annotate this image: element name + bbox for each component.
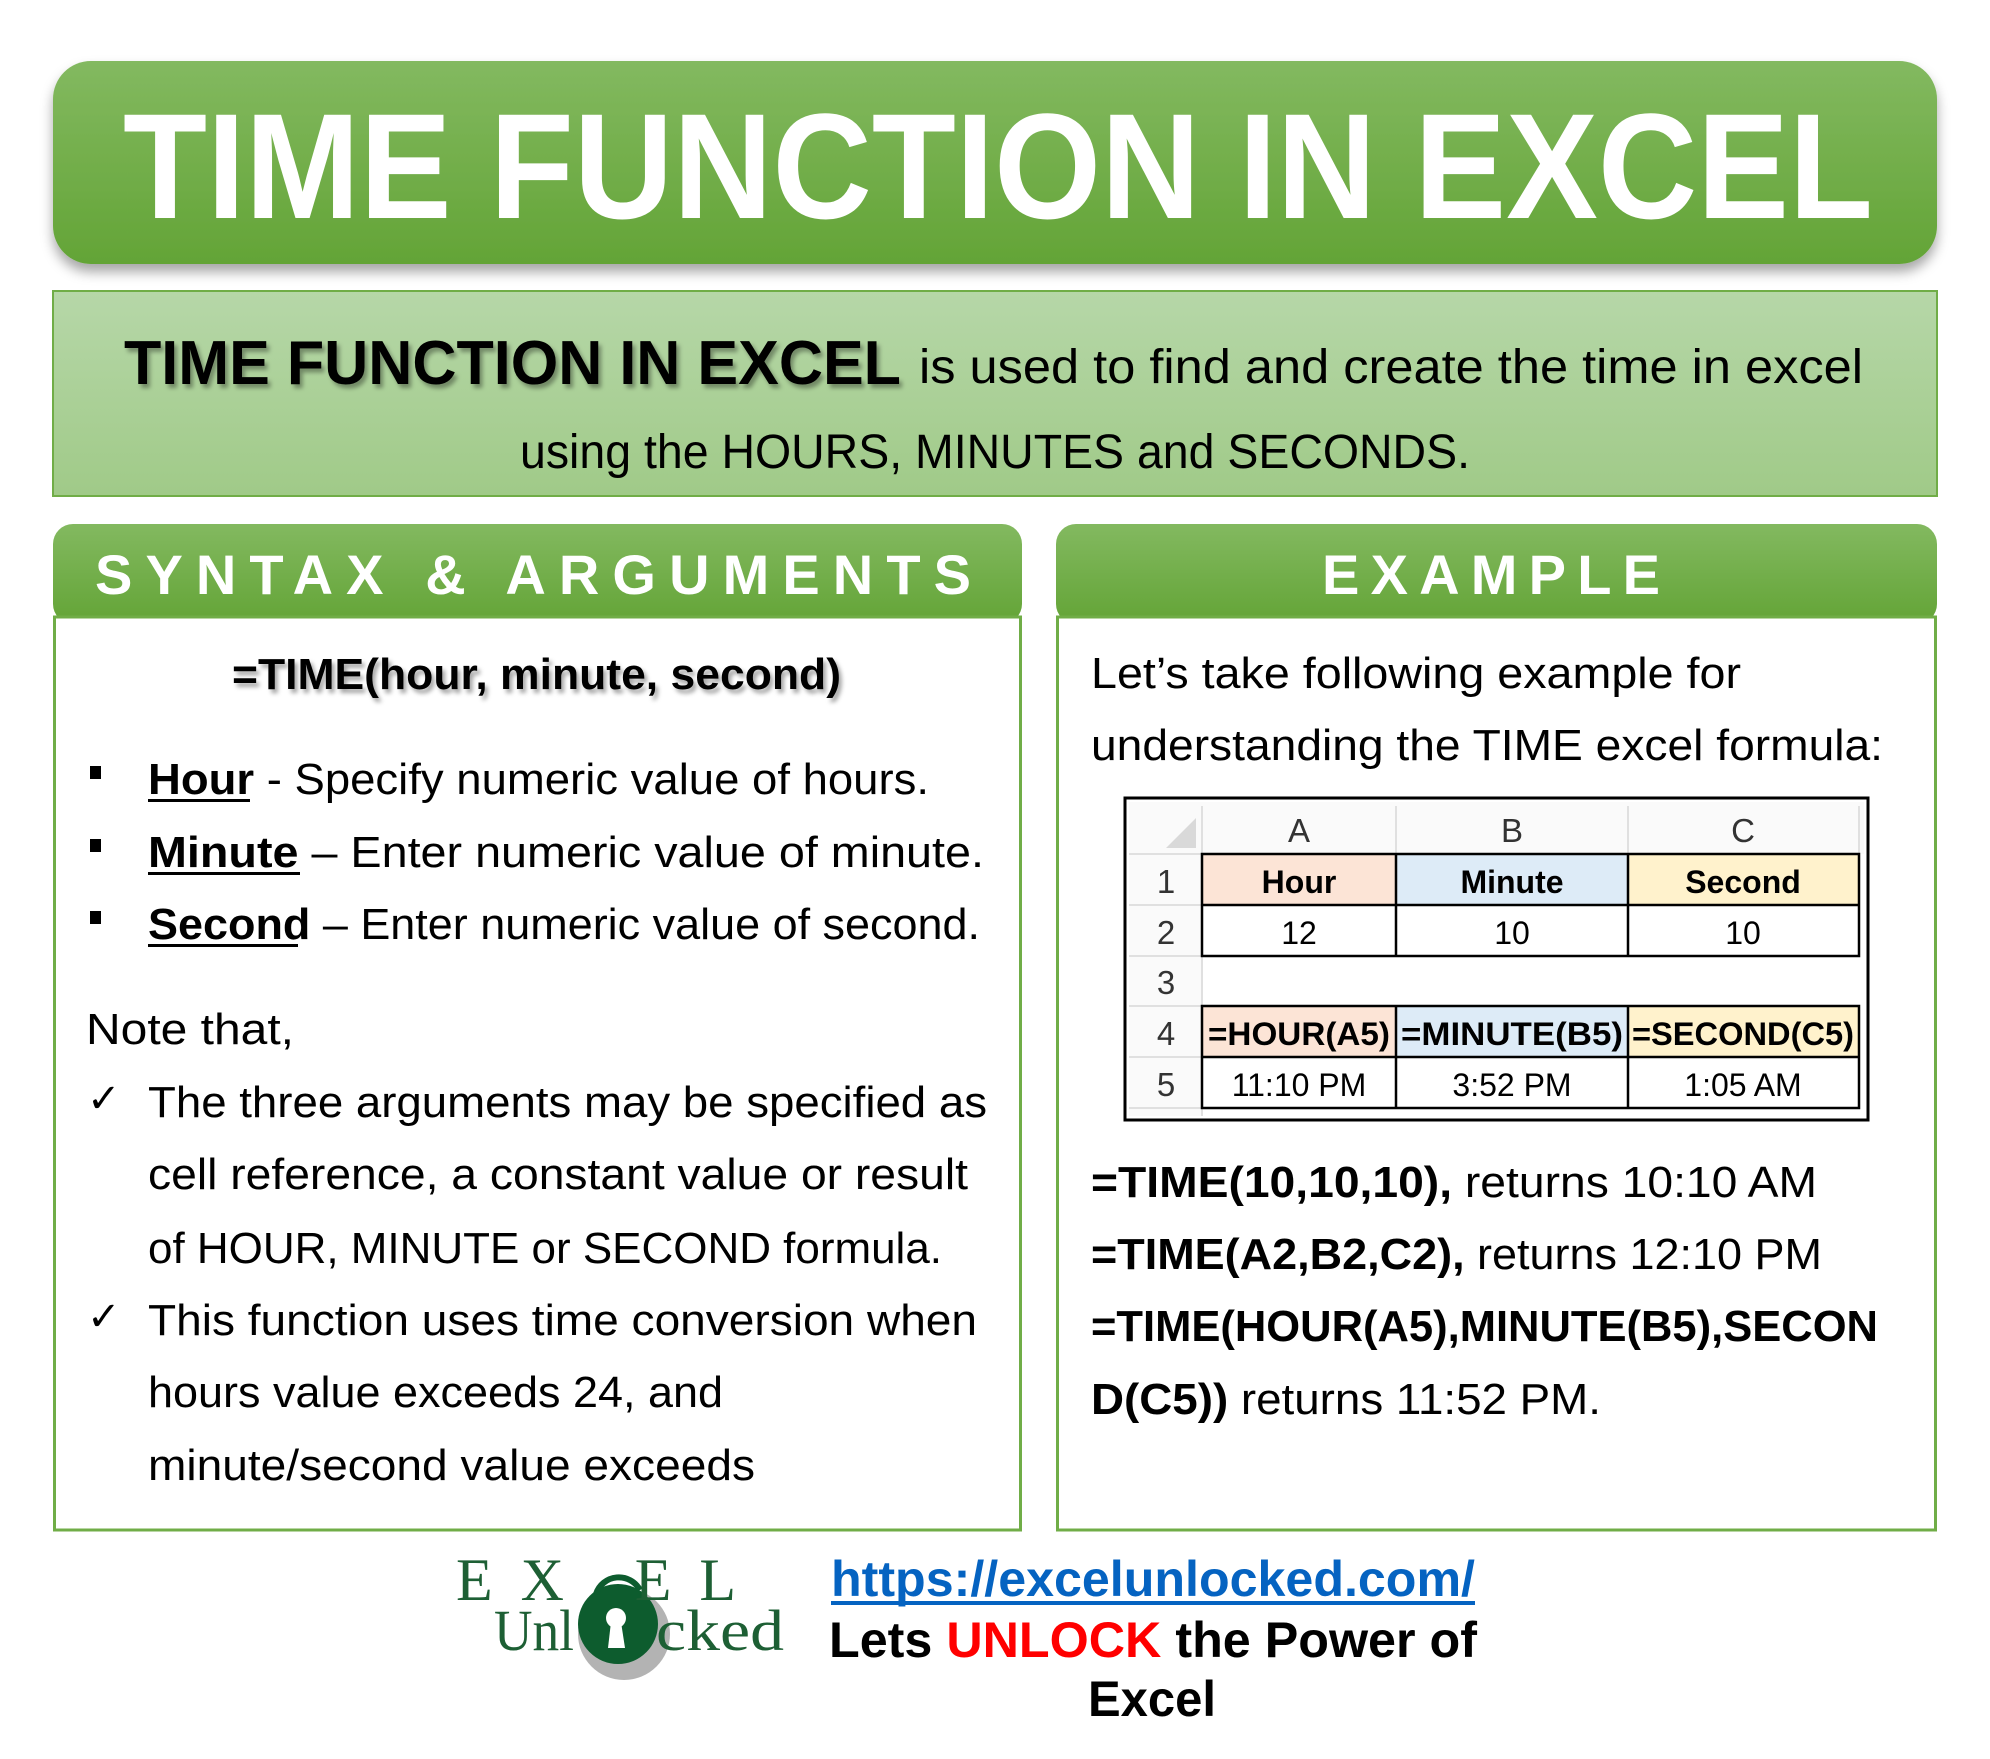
description text — [124, 329, 1863, 479]
description text: is used to find and create the time in excel — [919, 341, 1863, 394]
formula examples: =TIME(10,10,10), returns 10:10 AM — [1091, 1158, 1817, 1207]
formula examples: D(C5)) returns 11:52 PM. — [1091, 1375, 1601, 1424]
notes: The three arguments may be specified as — [148, 1078, 987, 1127]
panel header: example: EXAMPLE — [1322, 543, 1660, 606]
spreadsheet table: Second — [1685, 864, 1801, 900]
formula examples — [1091, 1158, 1878, 1424]
url and tagline: Excel — [1088, 1671, 1216, 1727]
description text: TIME FUNCTION IN EXCEL — [124, 329, 901, 398]
notes: minute/second value exceeds — [148, 1441, 755, 1490]
spreadsheet table: =HOUR(A5) — [1208, 1016, 1390, 1052]
notes — [86, 1005, 987, 1490]
notes: This function uses time conversion when — [148, 1296, 977, 1345]
intro text — [1091, 649, 1883, 770]
title banner — [53, 61, 1937, 264]
spreadsheet table: 5 — [1157, 1066, 1175, 1103]
spreadsheet table: Minute — [1460, 864, 1564, 900]
formula examples: =TIME(HOUR(A5),MINUTE(B5),SECON — [1091, 1302, 1878, 1351]
panel header: syntax: SYNTAX & ARGUMENTS — [95, 543, 971, 606]
logo: excel unlocked: cked — [656, 1598, 784, 1663]
panel header: example — [1056, 524, 1937, 624]
logo: excel unlocked: Unl — [494, 1598, 574, 1663]
logo: excel unlocked — [456, 1547, 784, 1680]
argument list: Hour - Specify numeric value of hours. — [148, 755, 929, 804]
notes: cell reference, a constant value or result — [148, 1150, 968, 1199]
spreadsheet table: =MINUTE(B5) — [1401, 1016, 1623, 1052]
logo: excel unlocked: EX EL — [456, 1547, 736, 1613]
intro text: understanding the TIME excel formula: — [1091, 721, 1883, 770]
spreadsheet table: 1:05 AM — [1684, 1067, 1802, 1103]
spreadsheet table: Hour — [1262, 864, 1336, 900]
intro text: Let’s take following example for — [1091, 649, 1741, 698]
panel header: syntax — [53, 524, 1022, 624]
footer — [456, 1547, 1477, 1727]
spreadsheet table: A — [1288, 812, 1310, 849]
argument list — [90, 755, 984, 949]
spreadsheet table: 3:52 PM — [1452, 1067, 1572, 1103]
notes: hours value exceeds 24, and — [148, 1368, 723, 1417]
spreadsheet table: 1 — [1157, 863, 1175, 900]
spreadsheet table — [1125, 798, 1868, 1120]
description text: using the HOURS, MINUTES and SECONDS. — [520, 426, 1470, 479]
description box — [53, 291, 1937, 496]
notes: of HOUR, MINUTE or SECOND formula. — [148, 1224, 942, 1273]
spreadsheet table: 12 — [1281, 915, 1317, 951]
spreadsheet table: 4 — [1157, 1015, 1175, 1052]
notes: ✓ — [87, 1077, 121, 1121]
spreadsheet table: 3 — [1157, 964, 1175, 1001]
spreadsheet table: 10 — [1494, 915, 1530, 951]
url and tagline: https://excelunlocked.com/ — [831, 1551, 1475, 1607]
formula examples: =TIME(A2,B2,C2), returns 12:10 PM — [1091, 1230, 1822, 1279]
title: TIME FUNCTION IN EXCEL — [123, 82, 1873, 250]
panel: syntax & arguments — [53, 524, 1022, 1530]
spreadsheet table: 2 — [1157, 914, 1175, 951]
spreadsheet table: C — [1731, 812, 1755, 849]
argument list: Minute – Enter numeric value of minute. — [148, 828, 984, 877]
spreadsheet table: 10 — [1725, 915, 1761, 951]
spreadsheet table: =SECOND(C5) — [1632, 1016, 1854, 1052]
notes: Note that, — [86, 1005, 294, 1054]
url and tagline — [829, 1551, 1477, 1727]
argument list: Second – Enter numeric value of second. — [148, 900, 980, 949]
url and tagline: Lets UNLOCK the Power of — [829, 1612, 1477, 1668]
notes: ✓ — [87, 1295, 121, 1339]
syntax formula: =TIME(hour, minute, second) — [232, 650, 841, 699]
spreadsheet table: 11:10 PM — [1232, 1067, 1366, 1103]
spreadsheet table: B — [1501, 812, 1523, 849]
panel: example — [1056, 524, 1937, 1530]
